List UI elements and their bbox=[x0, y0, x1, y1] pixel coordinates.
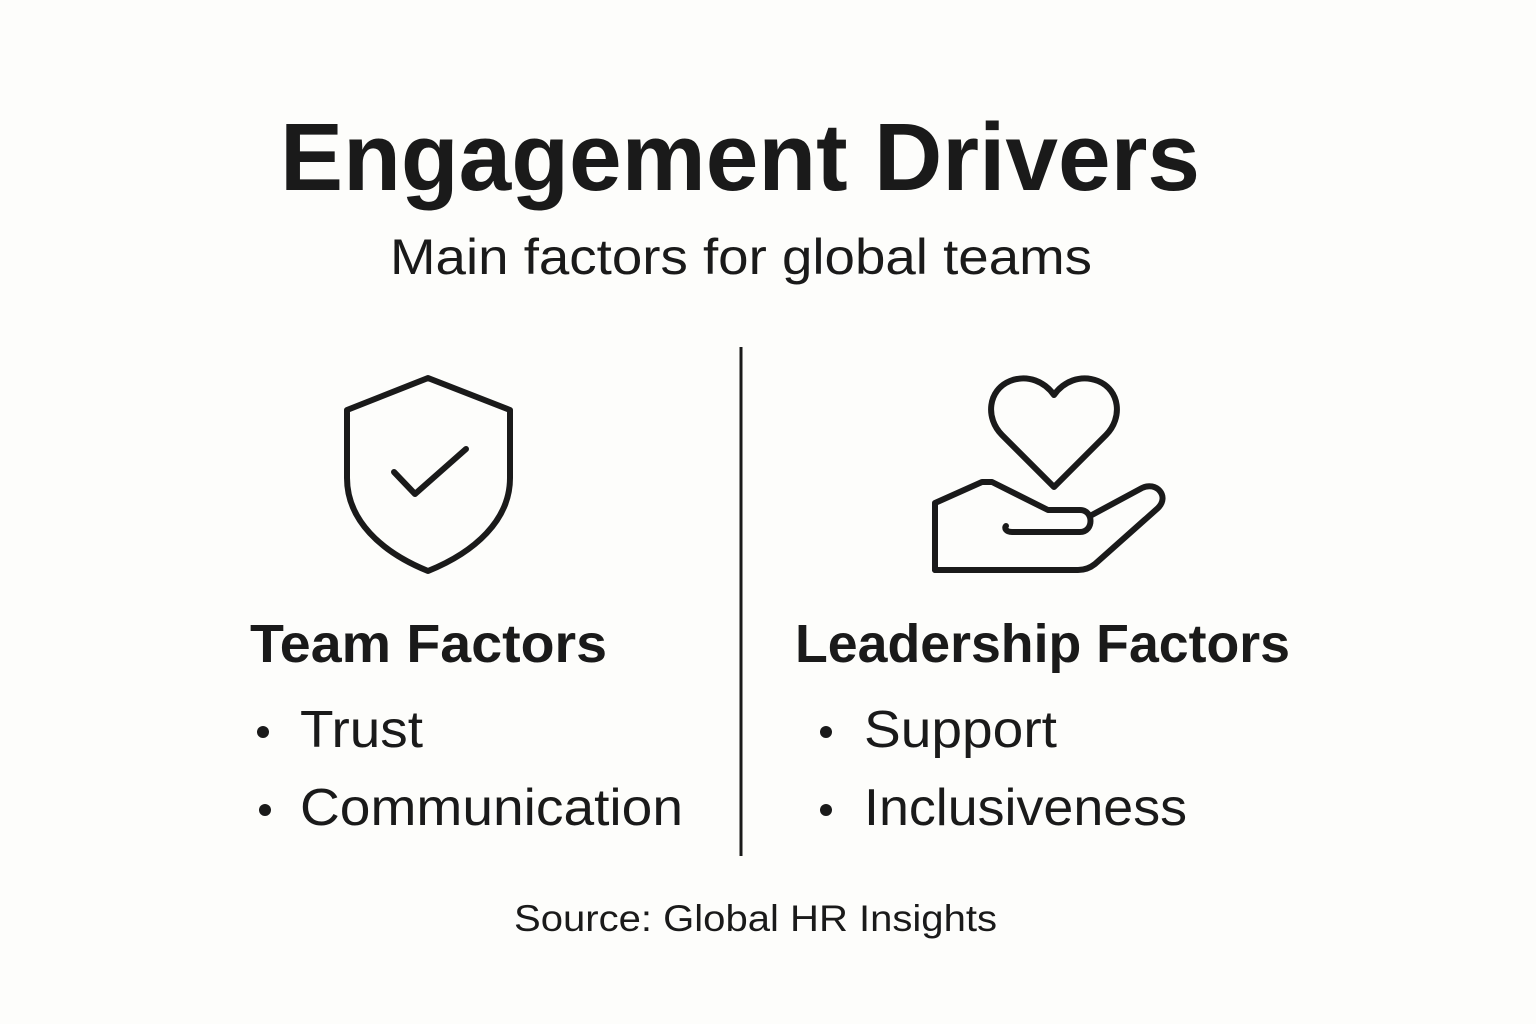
divider bbox=[740, 347, 742, 856]
list: leadership factors: Inclusiveness bbox=[864, 779, 1187, 837]
icon: heart in hand bbox=[935, 378, 1163, 570]
list: leadership factors bbox=[820, 701, 1187, 837]
list: team factors: Trust bbox=[300, 701, 424, 759]
list: team factors bbox=[257, 701, 683, 837]
source: Source: Global HR Insights bbox=[514, 898, 997, 939]
heading: team factors: Team Factors bbox=[250, 614, 607, 674]
subtitle: Main factors for global teams bbox=[390, 229, 1092, 285]
list: team factors: Communication bbox=[300, 779, 683, 837]
title: Engagement Drivers bbox=[280, 104, 1200, 211]
list: leadership factors: Support bbox=[864, 701, 1058, 759]
icon: shield with check bbox=[347, 378, 510, 571]
heading: leadership factors: Leadership Factors bbox=[795, 614, 1290, 674]
